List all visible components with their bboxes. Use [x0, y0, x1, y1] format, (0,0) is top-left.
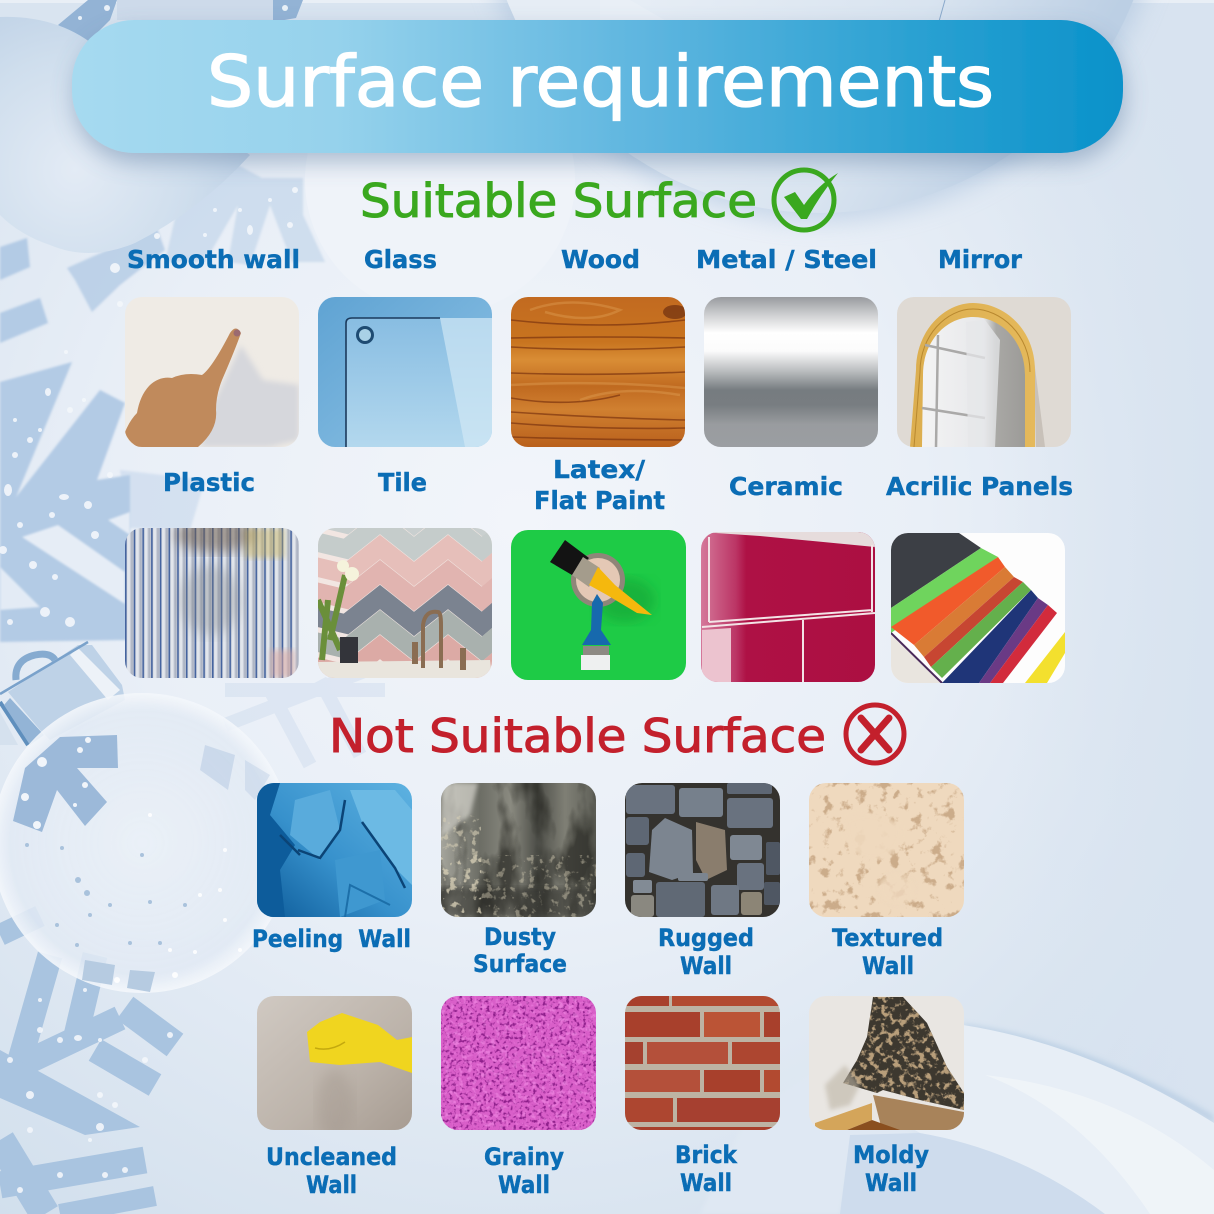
- labels: not suitable row one: Surface: [473, 950, 567, 978]
- labels: suitable row one: [127, 245, 1023, 274]
- speckles: [0, 5, 298, 1193]
- labels: not suitable row two: Wall: [680, 1169, 732, 1197]
- tile: glass: [318, 297, 492, 447]
- tile: pink herringbone: [318, 528, 492, 678]
- labels: suitable row two: Acrilic Panels: [886, 472, 1073, 501]
- tile: moldy wall: [809, 996, 964, 1130]
- tile: grainy wall: [441, 996, 596, 1130]
- title: Surface requirements: [207, 41, 994, 123]
- labels: suitable row one: Metal / Steel: [696, 245, 877, 274]
- labels: suitable row two: Latex/: [553, 455, 646, 484]
- labels: not suitable row one: Rugged: [658, 924, 754, 952]
- labels: not suitable row one: [252, 923, 943, 980]
- ribbon bottom right: [700, 1024, 1214, 1214]
- labels: not suitable row one: Peeling Wall: [252, 925, 411, 953]
- top snow pieces: [58, 0, 303, 43]
- labels: not suitable row one: Textured: [832, 924, 943, 952]
- labels: not suitable row two: Moldy: [853, 1141, 929, 1169]
- labels: suitable row two: Flat Paint: [534, 486, 665, 515]
- heading: suitable surface: Suitable Surface: [360, 174, 757, 228]
- labels: suitable row two: Plastic: [163, 468, 255, 497]
- tile: uncleaned wall: [257, 996, 412, 1140]
- labels: suitable row two: [163, 455, 1073, 515]
- icon: check mark: [774, 170, 838, 230]
- tile: acrylic panels: [891, 533, 1065, 683]
- tile: smooth wall: [125, 297, 299, 447]
- lower snowflake: [0, 916, 175, 1214]
- central top glow: [305, 45, 575, 315]
- tile: peeling wall: [257, 783, 412, 917]
- faint centre snowflake: [225, 665, 385, 765]
- labels: suitable row two: Tile: [378, 468, 427, 497]
- labels: not suitable row two: Grainy: [484, 1143, 564, 1171]
- ornament cap: [0, 642, 125, 745]
- labels: not suitable row two: Wall: [498, 1171, 550, 1199]
- heading: not suitable surface: Not Suitable Surface: [329, 709, 826, 763]
- upper right orb: [475, 0, 1165, 221]
- tile: textured wall: [809, 783, 964, 917]
- labels: not suitable row two: Wall: [865, 1169, 917, 1197]
- icon: cross mark: [846, 705, 904, 763]
- labels: suitable row one: Glass: [364, 245, 437, 274]
- labels: suitable row one: Wood: [561, 245, 640, 274]
- tile: rugged wall: [625, 783, 780, 917]
- glass bauble: [0, 693, 292, 993]
- labels: suitable row two: Ceramic: [729, 472, 843, 501]
- labels: not suitable row one: Wall: [680, 952, 732, 980]
- tile: brick wall: [625, 996, 780, 1130]
- labels: not suitable row two: [266, 1141, 929, 1199]
- tile: latex flat paint: [511, 530, 686, 680]
- labels: not suitable row two: Wall: [306, 1171, 357, 1199]
- title banner: [72, 20, 1123, 153]
- labels: suitable row one: Smooth wall: [127, 245, 300, 274]
- tile: ceramic: [701, 532, 875, 682]
- upper snowflake: [0, 165, 325, 642]
- labels: not suitable row two: Uncleaned: [266, 1143, 397, 1171]
- labels: not suitable row one: Dusty: [484, 923, 556, 951]
- tile: mirror: [897, 297, 1071, 447]
- tile: ribbed plastic: [125, 517, 299, 678]
- labels: not suitable row one: Wall: [862, 952, 914, 980]
- tile: wood: [511, 297, 687, 447]
- tile: dusty surface: [441, 783, 596, 917]
- top left balloon: [0, 17, 250, 253]
- labels: not suitable row two: Brick: [675, 1141, 738, 1169]
- labels: suitable row one: Mirror: [938, 245, 1023, 274]
- tile: metal: [704, 297, 878, 447]
